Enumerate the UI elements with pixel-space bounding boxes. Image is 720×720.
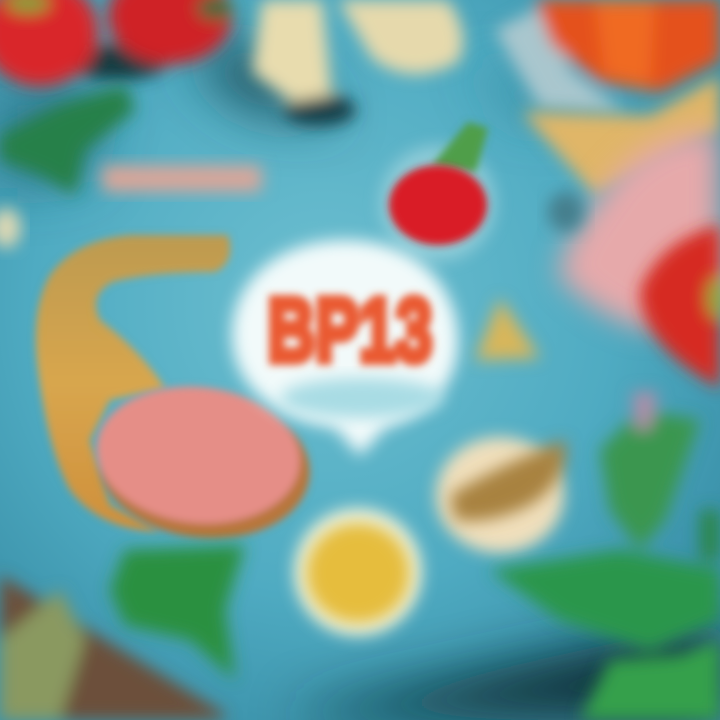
right red pepper xyxy=(640,225,720,388)
pink heading bar xyxy=(102,163,262,193)
yellow triangle xyxy=(475,298,540,360)
bubble text: BP13 xyxy=(268,281,432,381)
top left leaves xyxy=(0,85,135,195)
small tomato icon xyxy=(380,122,496,261)
right green leaves xyxy=(490,392,720,720)
right ham xyxy=(558,130,720,330)
top left tomatoes xyxy=(0,0,233,86)
pink heading bar: Nutrition xyxy=(106,163,256,193)
top centre pasta xyxy=(252,0,463,126)
yellow circle xyxy=(294,508,422,636)
right cheese wedge xyxy=(522,75,720,195)
top right plate edge and pepper xyxy=(495,0,720,112)
left small food item xyxy=(0,208,21,248)
cream circle with brown food xyxy=(436,437,566,553)
bottom left green leaves xyxy=(110,545,245,680)
speech bubble xyxy=(232,240,458,456)
bottom left wood xyxy=(0,575,225,720)
ham disc shadow and body xyxy=(89,377,317,549)
golden hook shape xyxy=(36,235,230,532)
small dark spot xyxy=(548,192,584,232)
